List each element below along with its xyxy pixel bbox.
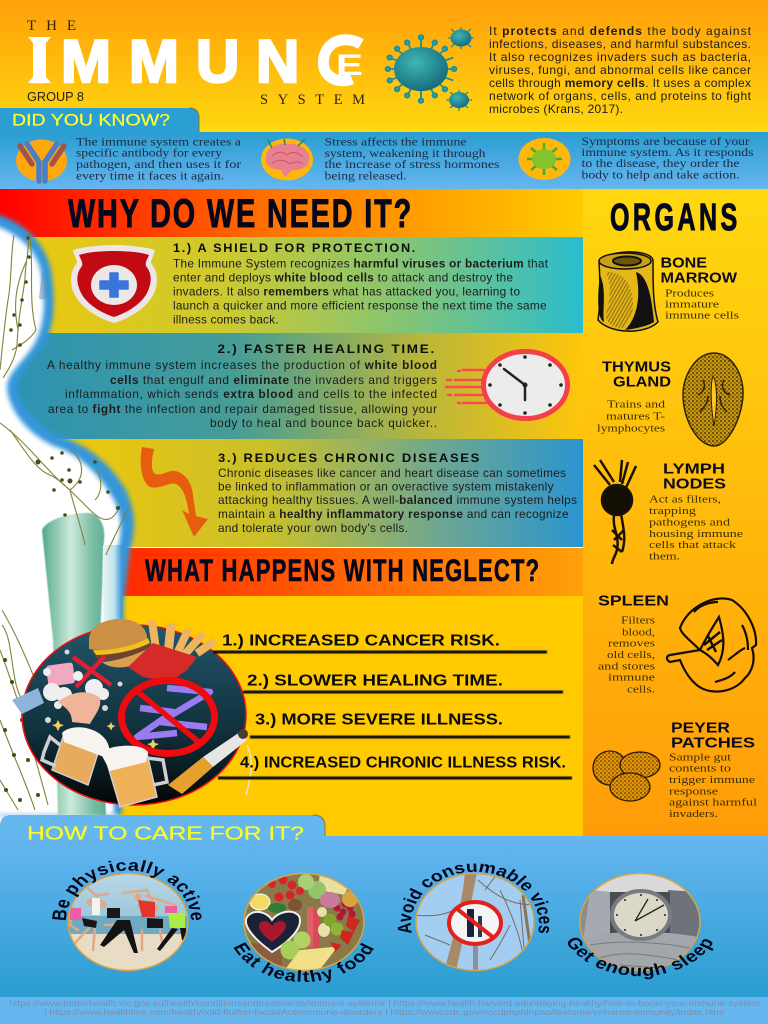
text: [47, 358, 437, 430]
label: PEYER: [671, 720, 730, 736]
description: [649, 494, 743, 562]
text: to the disease, they order the: [582, 157, 740, 170]
panel: neglect list background: [118, 596, 583, 836]
item 1: 1.) INCREASED CANCER RISK.: [222, 632, 500, 650]
care: get enough sleep: [568, 872, 714, 980]
item 1: [213, 632, 547, 654]
title block: [27, 18, 365, 108]
fact: stress: [261, 136, 500, 182]
text: Symptoms are because of your: [582, 135, 750, 148]
text: A healthy immune system increases the production of white blood: [47, 358, 437, 372]
label: LYMPH: [663, 460, 725, 478]
text: immune system. As it responds: [582, 146, 754, 159]
description: immune cells: [665, 310, 739, 322]
organ: spleen: [598, 592, 756, 696]
did you know tab: DID YOU KNOW?: [12, 112, 170, 130]
organ: thymus gland: [597, 353, 743, 446]
organs heading: ORGANS: [610, 196, 741, 238]
icon: burger: [89, 619, 151, 667]
organ: bone marrow: [598, 252, 739, 331]
icon: antibody: [16, 140, 67, 182]
description: response: [669, 786, 718, 798]
text: cells that engulf and eliminate the invaders and triggers: [110, 373, 437, 387]
bed and clock photo: [580, 872, 702, 975]
description: invaders.: [669, 808, 718, 820]
description: Trains and: [607, 398, 666, 410]
description: cells.: [627, 684, 655, 696]
description: immature: [665, 298, 719, 310]
text: illness comes back.: [173, 312, 278, 326]
intro paragraph: infections, diseases, and harmful substances.: [489, 37, 751, 51]
description: trapping: [649, 505, 697, 517]
text: [173, 256, 549, 326]
description: cells that attack: [649, 539, 737, 551]
description: trigger immune: [669, 774, 755, 786]
panel: reduces chronic diseases: [60, 439, 583, 547]
description: contents to: [669, 762, 732, 774]
panel: neglect heading: WHAT HAPPENS WITH NEGLECT?: [145, 552, 540, 588]
icon: brain: [261, 138, 313, 180]
description: [597, 398, 666, 434]
description: immune: [608, 672, 655, 684]
curved label: Get enough sleep: [568, 938, 714, 980]
text: every time it faces it again.: [76, 170, 224, 182]
description: [598, 614, 655, 696]
intro paragraph: It protects and defends the body against: [489, 24, 752, 38]
beach exercise photo: [67, 872, 189, 972]
heading: 3.) REDUCES CHRONIC DISEASES: [218, 453, 481, 465]
icon: shield: [71, 245, 157, 323]
text: inflammation, which sends extra blood and cells to the infected: [65, 387, 437, 401]
description: old cells,: [607, 649, 655, 661]
did you know band: [0, 132, 768, 189]
icon: beer mugs: [42, 727, 167, 807]
text: area to fight the infection and repair damaged tissue, allowing your: [48, 402, 437, 416]
fact: symptoms: [518, 135, 754, 182]
fact: antibody: [16, 136, 242, 182]
group label: GROUP 8: [27, 89, 84, 104]
curved label: Avoid consumable vices: [398, 864, 550, 934]
human body with lymph vessels: [0, 212, 134, 815]
food photo: [243, 872, 365, 972]
panel: why do we need it heading: [0, 189, 583, 237]
text: The Immune System recognizes harmful viruses or bacterium that: [173, 256, 549, 270]
organ: thymus gland: GLAND: [613, 374, 671, 390]
title: immune: IMMUN: [31, 28, 299, 95]
intro paragraph: [489, 24, 752, 116]
description: blood,: [622, 626, 655, 638]
label: BONE: [660, 254, 707, 272]
description: removes: [608, 638, 655, 650]
icon: clock with speed lines: [446, 352, 568, 418]
description: against harmful: [669, 796, 757, 808]
header background: [0, 0, 768, 133]
organ: peyer patches: PATCHES: [671, 734, 755, 752]
description: pathogens and: [649, 516, 731, 528]
item 3: [250, 712, 570, 738]
intro paragraph: viruses, fungi, and abnormal cells like cancer: [489, 63, 751, 77]
care: be physically active: [52, 860, 202, 972]
text: Chronic diseases like cancer and heart disease can sometimes: [218, 466, 566, 480]
no smoking sign photo: [415, 870, 537, 975]
care: eat healthy food: [234, 872, 374, 983]
text: system, weakening it through: [324, 147, 486, 160]
curved label: Eat healthy food: [234, 942, 374, 983]
text: body to heal and bounce back quicker..: [210, 416, 437, 430]
intro paragraph: network of organs, cells, and proteins to fight: [489, 89, 752, 103]
lymph vessels: [0, 232, 130, 810]
item 4: [218, 754, 572, 780]
description: lymphocytes: [597, 422, 665, 434]
text: [324, 136, 500, 182]
item 3: 3.) MORE SEVERE ILLNESS.: [255, 712, 503, 728]
description: matures T-: [606, 410, 665, 422]
description: Sample gut: [669, 752, 731, 764]
item 4: 4.) INCREASED CHRONIC ILLNESS RISK.: [240, 754, 566, 772]
text: launch a quicker and more efficient response the next time the same: [173, 298, 547, 312]
panel: organs column: [583, 189, 768, 836]
text: attacking healthy tissues. A well-balanced immune system helps: [218, 493, 577, 507]
text: enter and deploys white blood cells to attack and destroy the: [173, 270, 513, 284]
description: housing immune: [649, 528, 743, 540]
footer references: https://www.betterhealth.vic.gov.au/health/conditionsandtreatments/immune-system# | https://www.health.harvard.edu/staying-healthy/how-to-boost-your-immune-system: [9, 998, 760, 1008]
intro paragraph: microbes (Krans, 2017).: [489, 102, 623, 116]
panel: why do we need it heading: WHY DO WE NEED IT?: [68, 191, 413, 236]
description: and stores: [598, 660, 655, 672]
footer references: | https://www.healthline.com/health/cold-flu/fun-facts#Autoimmune-disorders | https://www.cdc.gov/nccdphp/dnpao/features/enhance-immunity/index.html: [44, 1007, 724, 1017]
icon: red x: [73, 656, 111, 687]
text: [582, 135, 754, 182]
organ: lymph nodes: [594, 460, 743, 564]
how to care tab: [0, 815, 325, 844]
text: maintain a healthy inflammatory response and can recognize: [218, 507, 569, 521]
item 2: 2.) SLOWER HEALING TIME.: [247, 672, 503, 690]
organ: peyer patches: [593, 720, 757, 820]
description: Filters: [621, 614, 655, 626]
title: the: THE: [27, 18, 76, 34]
text: the increase of stress hormones: [324, 158, 500, 171]
description: Produces: [665, 288, 714, 300]
text: being released.: [324, 170, 407, 182]
description: Act as filters,: [649, 494, 721, 506]
title: system: SYSTEM: [260, 92, 365, 108]
icon: jagged arrow: [141, 447, 208, 537]
icon: thymus: [683, 353, 743, 446]
panel: faster healing time: [0, 333, 583, 439]
label: THYMUS: [602, 358, 671, 376]
text: and tolerate your own body's cells.: [218, 521, 408, 535]
heading: 1.) A SHIELD FOR PROTECTION.: [173, 243, 417, 255]
icon: peyer patches: [593, 751, 660, 801]
neglect list: [213, 632, 572, 780]
text: [76, 136, 242, 182]
icon: spleen: [667, 598, 756, 692]
icon: lymph node: [594, 460, 636, 564]
text: [218, 466, 577, 535]
text: specific antibody for every: [76, 146, 222, 160]
did you know tab: [0, 108, 199, 132]
text: invaders. It also remembers what has attacked you, learning to: [173, 284, 520, 298]
heading: 2.) FASTER HEALING TIME.: [218, 344, 436, 356]
text: Stress affects the immune: [324, 136, 466, 148]
description: them.: [649, 550, 680, 562]
text: body to help and take action.: [582, 168, 740, 182]
text: pathogen, and then uses it for: [76, 158, 241, 171]
icon: neglect habits circle: [12, 619, 251, 807]
icon: bone: [598, 252, 658, 331]
intro paragraph: It also recognizes invaders such as bacteria,: [489, 50, 751, 64]
description: [669, 752, 757, 820]
organ: lymph nodes: NODES: [663, 476, 726, 492]
icon: soap and foam hand: [12, 650, 159, 750]
text: be linked to inflammation or an overactive system mistakenly: [218, 480, 554, 494]
curved label: Be physically active: [52, 860, 202, 920]
icon: no sleep sign: [122, 680, 214, 754]
intro paragraph: cells through memory cells. It uses a complex: [489, 76, 751, 90]
text: The immune system creates a: [76, 136, 242, 148]
icon: green germ: [518, 138, 570, 180]
care: avoid consumable vices: [398, 864, 550, 972]
panel: a shield for protection: [30, 237, 583, 333]
label: SPLEEN: [598, 592, 669, 610]
icon: virus cluster: [386, 27, 474, 111]
icon: cigarette: [168, 729, 251, 795]
organ: bone marrow: MARROW: [660, 270, 738, 286]
footer references: [0, 997, 768, 1024]
panel: neglect heading: [122, 548, 583, 596]
description: [665, 288, 739, 322]
icon: fries: [128, 620, 217, 682]
title: immune: E: [336, 49, 363, 82]
how to care tab: HOW TO CARE FOR IT?: [27, 824, 304, 844]
item 2: [243, 672, 563, 694]
panel: how to care background: [0, 836, 768, 997]
